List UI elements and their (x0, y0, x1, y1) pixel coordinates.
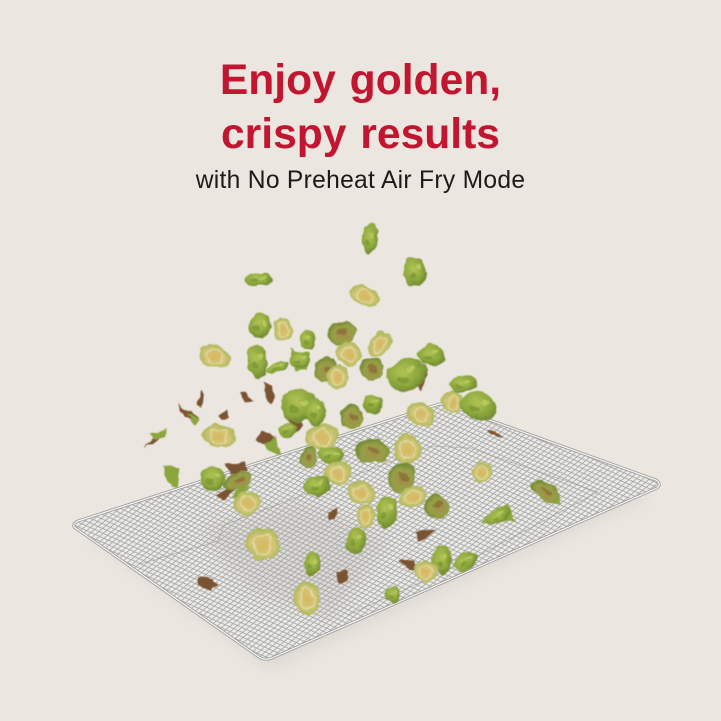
mesh surface (74, 404, 659, 659)
heading: crispy results (221, 110, 500, 158)
air fry mesh tray (74, 404, 659, 659)
heading: Enjoy golden, (220, 56, 501, 104)
heading (220, 56, 501, 158)
whole sprouts, seared sprouts and halves (360, 223, 380, 255)
subheading: with No Preheat Air Fry Mode (196, 167, 525, 194)
tray shadow (90, 420, 650, 668)
brussels sprouts pieces (144, 223, 562, 615)
brown charred leaf bits (144, 358, 503, 590)
green leaf bits (150, 350, 560, 524)
soft shade on the mesh (200, 500, 390, 620)
tray rim (74, 404, 659, 659)
tray inner recess (140, 446, 598, 615)
